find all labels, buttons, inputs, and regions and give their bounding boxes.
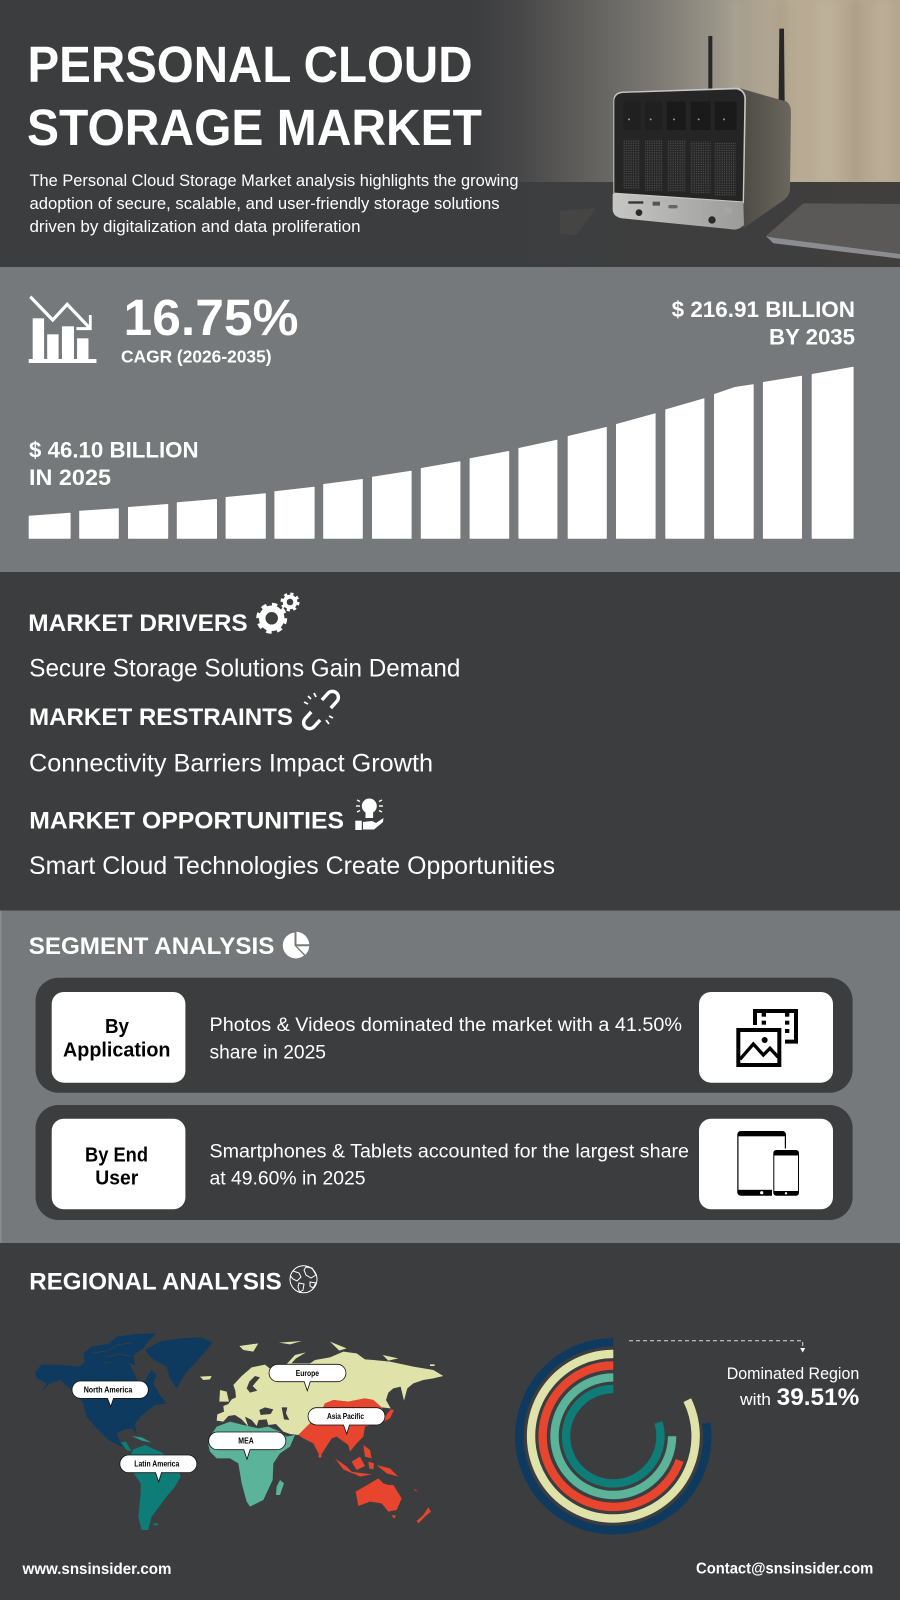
- heading: segment analysis: SEGMENT ANALYSIS: [29, 933, 274, 960]
- text: end user share: at 49.60% in 2025: [210, 1169, 366, 1190]
- world map: [35, 1333, 443, 1530]
- callout: MEA: [209, 1432, 286, 1459]
- text: driver: Secure Storage Solutions Gain Demand: [29, 655, 460, 683]
- callout: dominated region: Dominated Region: [727, 1365, 859, 1383]
- subtitle: driven by digitalization and data proliferation: [30, 218, 360, 236]
- title: PERSONAL CLOUD: [28, 36, 472, 93]
- card: by application: [36, 978, 853, 1093]
- CAGR label: CAGR (2026-2035): [121, 347, 272, 367]
- callout: Europe: Europe: [296, 1369, 319, 1378]
- callout: North America: [72, 1381, 148, 1407]
- heading: market drivers: MARKET DRIVERS: [28, 610, 248, 637]
- icon: globe: [290, 1266, 317, 1293]
- icon: gears: [258, 594, 298, 632]
- map: Europe and Russia: [200, 1341, 443, 1435]
- callout: MEA: MEA: [238, 1436, 254, 1445]
- heading: market opportunities: MARKET OPPORTUNITIES: [29, 807, 344, 834]
- map: Latin America: [121, 1436, 181, 1530]
- label box: by application: By: [105, 1016, 130, 1038]
- callout: dominated region: with: [739, 1391, 771, 1409]
- subtitle: adoption of secure, scalable, and user-friendly storage solutions: [30, 195, 499, 213]
- end value: BY 2035: [769, 325, 855, 350]
- title: STORAGE MARKET: [27, 99, 482, 156]
- start value: $ 46.10 BILLION: [29, 438, 199, 462]
- icon: broken chain: [301, 689, 341, 731]
- callout: Asia Pacific: Asia Pacific: [327, 1412, 364, 1421]
- label box: by end user: By End: [85, 1144, 148, 1166]
- text: end user share: Smartphones & Tablets accounted for the largest share: [210, 1142, 689, 1162]
- callout: dominated region: 39.51%: [777, 1384, 859, 1411]
- card: by end user: [36, 1105, 853, 1220]
- icon box: photos and film: [699, 992, 833, 1083]
- header photo: storage device on desk: [470, 0, 900, 267]
- subtitle: The Personal Cloud Storage Market analysis highlights the growing: [30, 172, 518, 190]
- panel: market growth: [0, 267, 900, 572]
- icon: pie chart: [283, 932, 309, 958]
- start value: IN 2025: [29, 465, 111, 490]
- label box: by application: Application: [63, 1040, 170, 1062]
- icon: chart with arrow: [29, 297, 96, 363]
- text: application share: share in 2025: [210, 1042, 326, 1063]
- panel: drivers, restraints, opportunities: [0, 572, 900, 910]
- end value: $ 216.91 BILLION: [672, 297, 855, 322]
- label box: by end user: User: [95, 1167, 138, 1189]
- panel: segment analysis: [0, 910, 900, 1243]
- icon: idea in hand: [355, 798, 384, 830]
- title: [27, 36, 482, 156]
- start value: [29, 438, 199, 490]
- map: North America and Greenland: [35, 1333, 213, 1447]
- callout: dominated region: [727, 1365, 859, 1411]
- panel: regional analysis: [0, 1243, 900, 1600]
- subtitle: [30, 172, 518, 236]
- bar chart: [29, 367, 853, 538]
- heading: regional analysis: REGIONAL ANALYSIS: [29, 1269, 282, 1296]
- callout: Latin America: [120, 1455, 197, 1482]
- callout: Latin America: Latin America: [134, 1460, 180, 1469]
- icon box: tablet and phone: [699, 1119, 833, 1209]
- label box: by application: [52, 992, 185, 1083]
- callout: Europe: [269, 1364, 346, 1391]
- text: application share: [210, 1015, 682, 1063]
- callout: Asia Pacific: [308, 1408, 385, 1434]
- heading: market restraints: MARKET RESTRAINTS: [29, 704, 293, 731]
- arrow: dashed leader: [629, 1341, 805, 1352]
- end value: [672, 297, 855, 350]
- label box: by end user: [52, 1119, 185, 1209]
- callout: North America: North America: [84, 1386, 133, 1395]
- text: end user share: [210, 1142, 689, 1190]
- text: restraint: Connectivity Barriers Impact Growth: [29, 750, 433, 778]
- text: opportunity: Smart Cloud Technologies Create Opportunities: [29, 852, 555, 880]
- text: application share: Photos & Videos dominated the market with a 41.50%: [210, 1015, 682, 1036]
- footer: website: www.snsinsider.com: [22, 1561, 171, 1578]
- radial bar chart: [519, 1342, 707, 1530]
- map: Middle East and Africa: [208, 1422, 295, 1507]
- CAGR value: 16.75%: [124, 289, 298, 346]
- footer: contact: Contact@snsinsider.com: [696, 1560, 873, 1577]
- panel: header: [0, 0, 900, 267]
- map: Asia Pacific: [298, 1398, 431, 1523]
